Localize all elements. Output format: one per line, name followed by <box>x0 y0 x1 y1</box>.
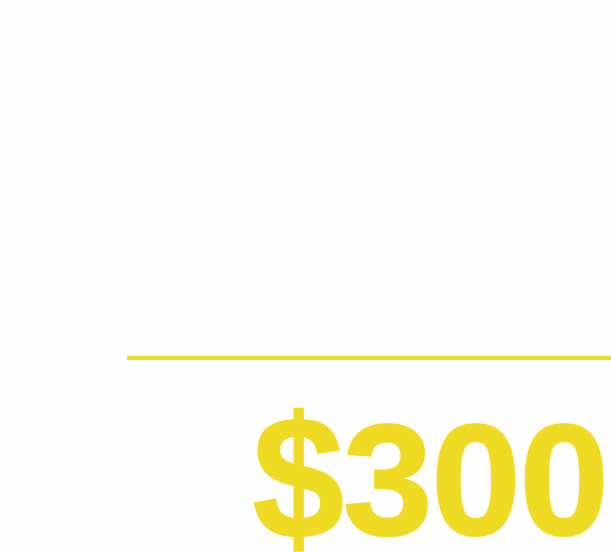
divider rule <box>127 356 611 360</box>
big number: $300 <box>252 380 608 552</box>
